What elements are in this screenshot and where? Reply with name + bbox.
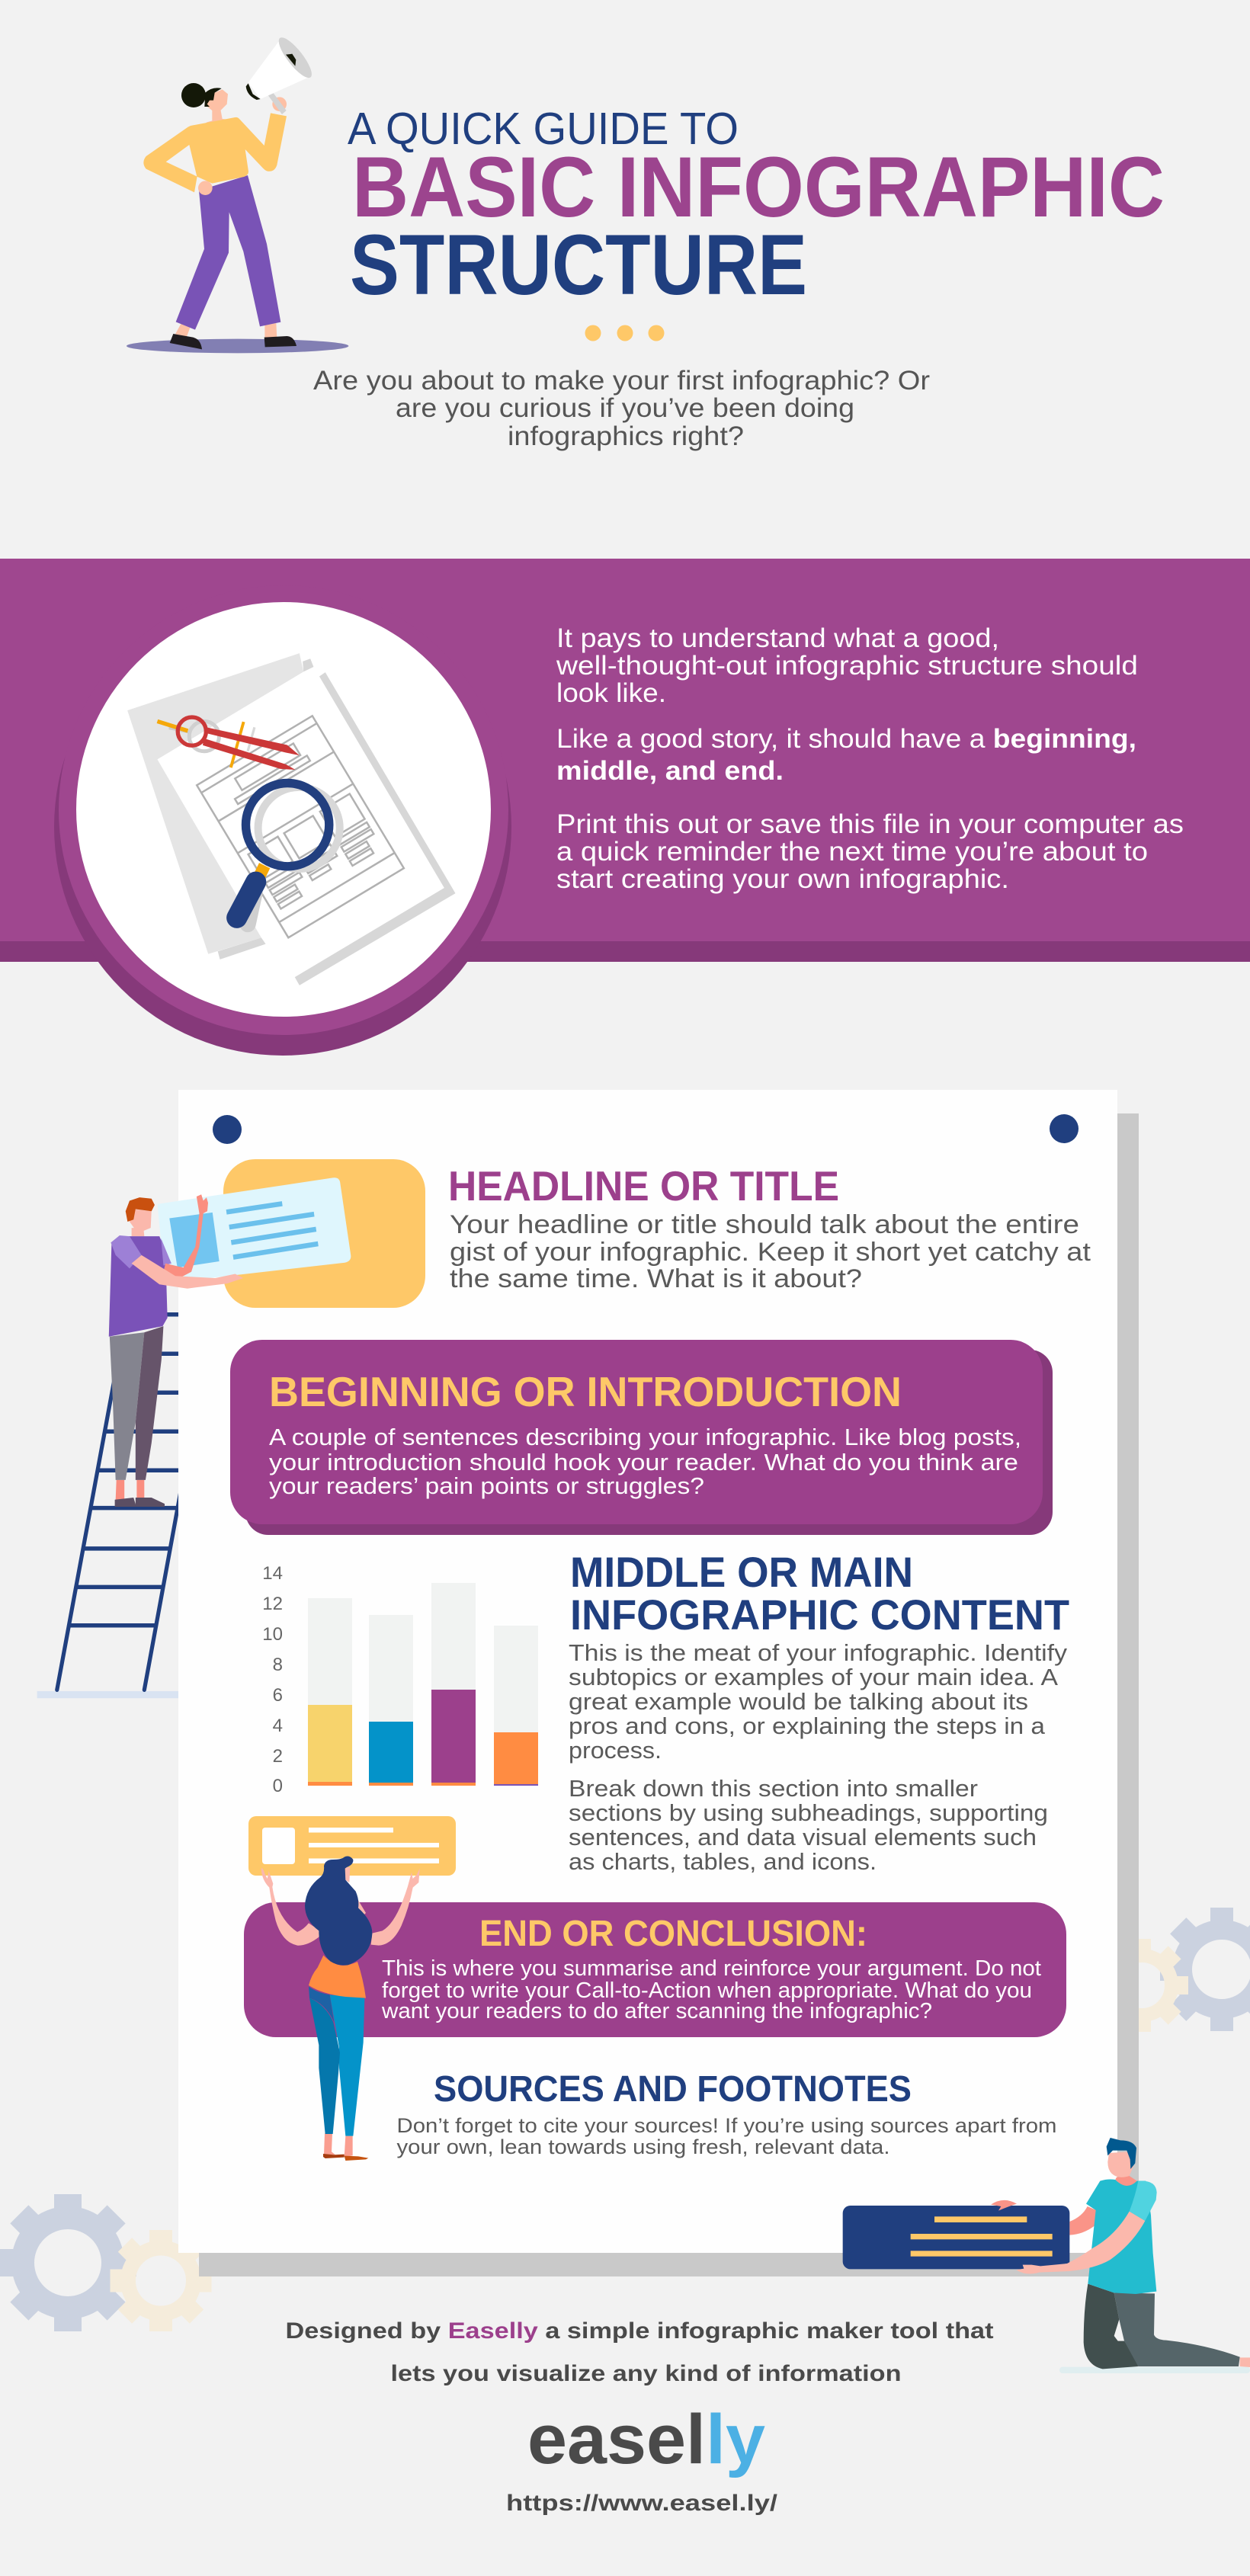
band text: Like a good story, it should have a beginning, bbox=[556, 724, 1136, 754]
band text: Print this out or save this file in your computer as bbox=[556, 809, 1184, 839]
heading: end or conclusion: END OR CONCLUSION: bbox=[479, 1914, 867, 1954]
text: middle description: Break down this section into smaller bbox=[569, 1775, 978, 1802]
band text: It pays to understand what a good, bbox=[556, 623, 999, 653]
panel: end or conclusion bbox=[244, 1902, 1066, 2037]
footer credit text: Designed by Easelly a simple infographic maker tool that bbox=[285, 2318, 994, 2344]
title bbox=[348, 104, 1165, 312]
intro text: are you curious if you’ve been doing bbox=[396, 393, 854, 423]
bar chart: 8 bbox=[273, 1655, 283, 1675]
text: conclusion description: forget to write your Call-to-Action when appropriate. What do you bbox=[382, 1978, 1032, 2003]
panel: poster sheet bbox=[178, 1090, 1139, 2276]
text: middle description bbox=[569, 1639, 1068, 1875]
text: middle description: as charts, tables, and icons. bbox=[569, 1848, 877, 1875]
heading: sources and footnotes: SOURCES AND FOOTNOTES bbox=[434, 2069, 912, 2110]
footer credit text: lets you visualize any kind of information bbox=[390, 2361, 901, 2386]
text: headline description: gist of your infographic. Keep it short yet catchy at bbox=[450, 1238, 1091, 1267]
yellow headline box bbox=[223, 1159, 425, 1308]
text: headline description: Your headline or title should talk about the entire bbox=[450, 1210, 1079, 1239]
heading: headline or title: HEADLINE OR TITLE bbox=[448, 1162, 839, 1210]
yellow card held by woman bbox=[248, 1816, 456, 1876]
text: middle description: process. bbox=[569, 1737, 662, 1764]
illustration: man on ladder with card bbox=[109, 1177, 351, 1507]
text: middle description: sections by using subheadings, supporting bbox=[569, 1799, 1048, 1826]
title: BASIC INFOGRAPHIC bbox=[352, 139, 1165, 235]
text: headline description: the same time. What is it about? bbox=[450, 1264, 862, 1293]
bar chart: 14 bbox=[262, 1563, 283, 1584]
band text: look like. bbox=[556, 678, 666, 708]
heading: middle or main content: INFOGRAPHIC CONTENT bbox=[570, 1591, 1069, 1639]
band text: well-thought-out infographic structure should bbox=[556, 651, 1138, 681]
text: beginning description bbox=[269, 1424, 1021, 1499]
illustration: woman with megaphone bbox=[127, 34, 348, 353]
text: beginning description: A couple of sentences describing your infographic. Like blog posts, bbox=[269, 1424, 1021, 1450]
intro text bbox=[313, 366, 930, 451]
bar chart: 4 bbox=[273, 1716, 283, 1736]
icon: gears right bbox=[1095, 1908, 1250, 2032]
band text: a quick reminder the next time you’re about to bbox=[556, 837, 1148, 867]
text: middle description: sentences, and data visual elements such bbox=[569, 1824, 1037, 1850]
bar chart: 10 bbox=[262, 1624, 283, 1645]
text: middle description: pros and cons, or explaining the steps in a bbox=[569, 1713, 1046, 1739]
text: conclusion description: This is where you summarise and reinforce your argument. Do not bbox=[382, 1956, 1041, 1981]
title: STRUCTURE bbox=[350, 217, 807, 312]
bar chart: 0 bbox=[273, 1776, 283, 1796]
icon: gears left bbox=[0, 2194, 212, 2331]
decorative dots bbox=[585, 325, 665, 341]
panel: purple band bbox=[0, 559, 1250, 1056]
text: conclusion description bbox=[381, 1956, 1041, 2023]
text: sources description bbox=[396, 2114, 1056, 2158]
logo: easelly: easelly bbox=[527, 2401, 765, 2478]
illustration: kneeling man with navy card bbox=[843, 2138, 1250, 2373]
text: middle description: great example would be talking about its bbox=[569, 1688, 1028, 1715]
text: sources description: your own, lean towards using fresh, relevant data. bbox=[396, 2135, 890, 2158]
url: https://www.easel.ly/ bbox=[506, 2491, 778, 2516]
heading: middle or main content bbox=[570, 1548, 1069, 1639]
bar chart: 12 bbox=[262, 1594, 283, 1614]
intro text: Are you about to make your first infographic? Or bbox=[313, 366, 930, 396]
text: beginning description: your introduction should hook your reader. What do you think are bbox=[269, 1449, 1018, 1475]
band text bbox=[556, 623, 1184, 894]
illustration: woman holding card bbox=[261, 1857, 420, 2161]
text: headline description bbox=[450, 1210, 1091, 1293]
bar chart: 2 bbox=[273, 1746, 283, 1767]
intro text: infographics right? bbox=[508, 421, 744, 451]
text: middle description: This is the meat of your infographic. Identify bbox=[569, 1639, 1068, 1666]
band text: start creating your own infographic. bbox=[556, 864, 1009, 894]
band text: middle, and end. bbox=[556, 756, 784, 786]
heading: beginning: BEGINNING OR INTRODUCTION bbox=[269, 1368, 902, 1415]
text: beginning description: your readers’ pain points or struggles? bbox=[269, 1472, 704, 1499]
footer credit text bbox=[285, 2318, 994, 2386]
text: conclusion description: want your readers to do after scanning the infographic? bbox=[381, 1999, 932, 2023]
illustration: ladder bbox=[37, 1315, 197, 1698]
text: middle description: subtopics or examples of your main idea. A bbox=[569, 1664, 1058, 1690]
bar chart: 6 bbox=[273, 1685, 283, 1706]
panel: beginning or introduction bbox=[230, 1340, 1053, 1535]
text: sources description: Don’t forget to cite your sources! If you’re using sources apart from bbox=[396, 2114, 1056, 2137]
heading: middle or main content: MIDDLE OR MAIN bbox=[570, 1548, 913, 1596]
bar chart bbox=[262, 1563, 538, 1796]
icon: blueprint with compass and magnifying glass bbox=[127, 653, 455, 985]
title: A QUICK GUIDE TO bbox=[348, 104, 739, 154]
